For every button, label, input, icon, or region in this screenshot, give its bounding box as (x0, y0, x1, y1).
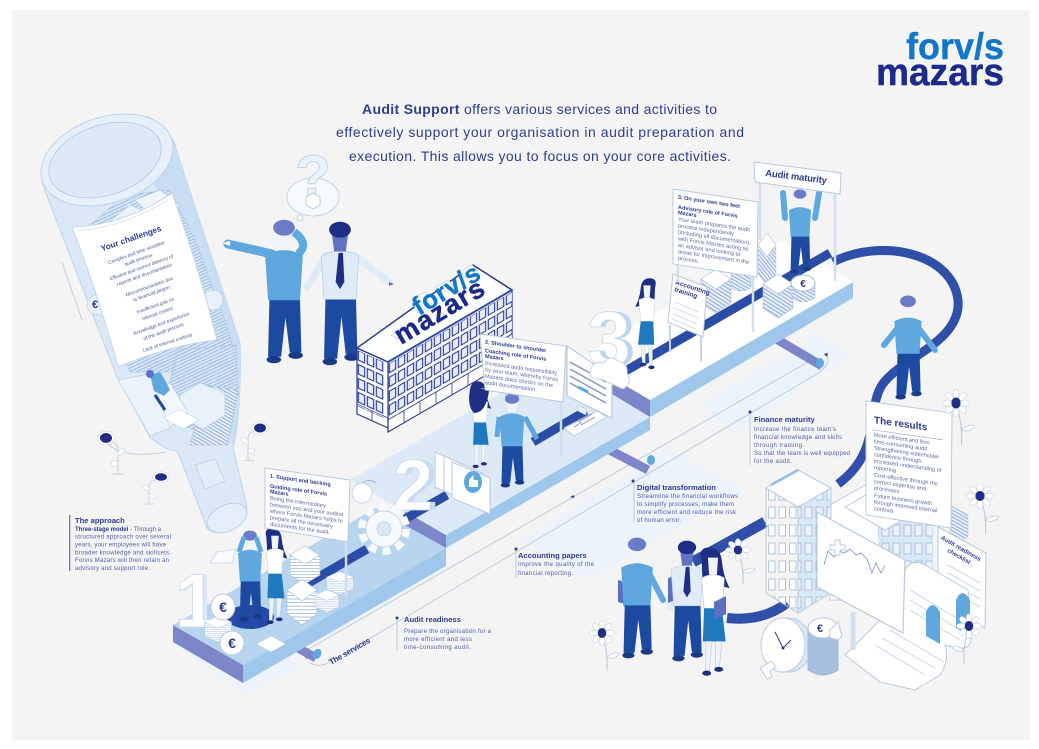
number 1: 1 (179, 559, 221, 644)
checklist title: checklist (946, 548, 971, 566)
track arrows (304, 353, 828, 659)
front building roof (766, 470, 831, 507)
sign 3: on your own two feet: an advisor and looking at (678, 243, 741, 258)
woman on stage 1 (266, 528, 287, 624)
sign: the results: More efficient and less (874, 433, 930, 446)
intro text (336, 101, 744, 164)
sign 2: shoulder to shoulder: Increased audit responsibility (485, 361, 557, 377)
sign: the results: controls (874, 506, 894, 515)
man with tie (307, 222, 394, 365)
number 1: 1 (175, 559, 217, 644)
sign 1: support and backing: prepare all the necessary (270, 515, 333, 530)
sign: audit maturity (754, 162, 841, 281)
logo: forvis mazars (876, 26, 1004, 94)
roof letter blocks (391, 265, 478, 339)
stage 2 people (469, 381, 537, 488)
front building left wall (766, 488, 798, 613)
sign 3: on your own two feet: process. (678, 256, 700, 265)
man on stage 1 (238, 530, 262, 622)
monitor (567, 346, 612, 418)
motion lines (62, 116, 176, 454)
flip chart: accounting training (668, 274, 711, 362)
sign: audit maturity: Audit maturity (765, 168, 828, 187)
challenges list (108, 240, 194, 354)
text: digital transformation (632, 480, 738, 524)
flip chart title: training (673, 286, 698, 300)
sign: the results: Cost-effective through the (874, 473, 938, 488)
sign 3: on your own two feet: Advisory role of Forvis (678, 205, 738, 220)
challenges list: Complex and time sensitive (108, 240, 166, 266)
connector rods between stages (298, 340, 824, 661)
stage 3 teacher (635, 278, 688, 369)
challenges list: reports and documentation (116, 262, 173, 288)
number 2: 2 (398, 446, 438, 526)
sign 1: support and backing (265, 468, 350, 597)
text: accounting papers: Improve the quality of the (518, 562, 595, 568)
text: the approach: structured approach over several (75, 534, 171, 540)
stage 3 stacks and coins (701, 233, 815, 318)
sign: the results: Future business growth (874, 493, 932, 507)
euro coin lower: € (228, 635, 236, 651)
text: audit readiness: Prepare the organisation for a (404, 629, 492, 635)
text: the approach: The approach (75, 516, 125, 525)
sign: the results: through improved internal (874, 500, 937, 514)
rear building (830, 478, 932, 600)
large flowers (590, 389, 999, 671)
sign 2: shoulder to shoulder (480, 334, 566, 457)
number 3: 3 (592, 295, 636, 383)
sign 2: shoulder to shoulder: Mazars does checks on the (485, 374, 553, 389)
sign: the results: The results (874, 415, 928, 434)
the services label: The services (328, 636, 372, 667)
sign: the results (866, 401, 952, 528)
forvis mazars building (357, 257, 512, 432)
woman from behind (469, 381, 491, 468)
sign 2: shoulder to shoulder: 2. Shoulder to shoulder (485, 340, 547, 354)
text: accounting papers: Accounting papers (518, 551, 587, 560)
text: the approach: Three-stage model - Through a (75, 527, 162, 533)
apple icon (352, 480, 376, 503)
text: finance maturity (748, 410, 850, 465)
paper label: your challenges (72, 193, 217, 367)
person inside bottle (146, 370, 170, 410)
intro text: execution. This allows you to focus on your core activities. (349, 148, 731, 164)
man with folder (618, 538, 663, 658)
challenges list: internal control (142, 306, 174, 322)
text: digital transformation: more efficient and reduce the risk (637, 510, 737, 516)
challenges list: audit process (124, 252, 154, 268)
logo: forvis mazars: forv/s (906, 26, 1004, 67)
platform stage 3 (579, 240, 853, 417)
walking man on ribbon (884, 296, 935, 399)
building left wall (357, 348, 388, 428)
roof logo: forv/s (407, 257, 486, 321)
text: the approach: broader knowledge and skillsets. (75, 550, 171, 556)
walking man (497, 393, 537, 488)
bottle opening (39, 109, 171, 211)
clock (760, 618, 812, 679)
maturity man (783, 189, 819, 274)
text: audit readiness (396, 615, 492, 651)
checklist document back (938, 527, 986, 628)
sign 1: support and backing: Guiding role of Forvis (270, 484, 327, 498)
woman with folder (701, 547, 730, 676)
thumbs up cards (435, 452, 490, 514)
text: finance maturity: through training. (754, 443, 804, 449)
sign 2: shoulder to shoulder: Coaching role of Forvis (485, 348, 546, 363)
building roof (357, 265, 512, 362)
challenges list: of the audit process (143, 322, 185, 342)
euro coin upper (211, 594, 235, 620)
text: digital transformation: to simplify processes, make them (637, 502, 734, 508)
sign: the results: correct expertise and (874, 479, 926, 492)
sign: the results: time-consuming audit (874, 439, 927, 453)
speech bubble with question mark (287, 144, 339, 221)
sign 3: on your own two feet: Your team prepares the audit (678, 217, 750, 234)
sign 3: on your own two feet: Mazars (678, 210, 697, 219)
text: the approach (69, 515, 171, 572)
flip chart title: Accounting (674, 279, 711, 297)
checklist title: Audit readiness (940, 535, 982, 563)
sign 3: on your own two feet: with Forvis Mazars acting as (677, 236, 749, 253)
text: audit readiness: more efficient and less (404, 637, 472, 643)
text: accounting papers: financial reporting. (518, 571, 573, 577)
gear (362, 507, 406, 551)
challenges list: Efficient and correct delivery of (109, 254, 175, 282)
bottle rim (29, 98, 185, 222)
text: the approach: advisory and support role. (75, 566, 150, 572)
text: the approach: Forvis Mazars will then retain an (75, 558, 169, 564)
euro mark inside bottle: € (92, 299, 98, 311)
number 2: 2 (393, 446, 433, 526)
challenges list: to financial jargon (133, 285, 171, 303)
bottle body (42, 140, 247, 532)
roof logo: mazars (389, 273, 490, 350)
sign 2: shoulder to shoulder: Mazars (485, 354, 504, 362)
paper stacks stage 1 (204, 546, 354, 652)
sign 3: on your own two feet (673, 189, 758, 332)
man pointing (222, 220, 303, 363)
chart board (817, 512, 905, 650)
intro text: Audit Support offers various services and activities to (362, 101, 717, 117)
small flowers left (97, 422, 269, 504)
sign 1: support and backing: where Forvis Mazars helps to (269, 509, 343, 525)
bottle with challenges (29, 98, 252, 539)
blue ribbon path (693, 251, 958, 619)
front building right wall (798, 488, 831, 613)
sign: the results: processes (874, 486, 900, 495)
coin stack: € (817, 623, 823, 635)
tablet (564, 411, 607, 436)
bottom people group (618, 538, 730, 676)
sign: the results: Strengthening stakeholder (874, 446, 939, 461)
cloud (590, 358, 629, 389)
text: finance maturity: So that the team is well equipped (754, 451, 850, 457)
challenges list: Insufficient grip on (136, 296, 176, 316)
number 3: 3 (587, 295, 631, 383)
coin stack (808, 618, 842, 675)
services track line (300, 354, 828, 665)
text: audit readiness: time-consuming audit. (404, 645, 471, 651)
bottle shaded side (150, 140, 240, 448)
sign 1: support and backing: Mazars (270, 489, 289, 498)
text: finance maturity: Increase the finance team's (754, 427, 836, 433)
sign 1: support and backing: Being the intermediary (270, 496, 326, 510)
platform stage 1 (173, 508, 446, 683)
stage 3 stacks and coins: € (800, 279, 806, 290)
sign: the results: increased understanding of (874, 459, 942, 474)
challenges heading: Your challenges (99, 223, 163, 253)
bottle contents (87, 190, 238, 489)
platform stage 2 (350, 352, 650, 548)
side stack (950, 505, 968, 547)
sign 1: support and backing: between you and your auditor (270, 502, 344, 519)
euro coin lower (220, 631, 244, 655)
sign 3: on your own two feet: (including all documentation), (678, 230, 751, 247)
text: finance maturity: for the audit. (754, 459, 792, 465)
sign 3: on your own two feet: process independently (678, 223, 734, 238)
sign 2: shoulder to shoulder: by your team, whereby Forvis (485, 367, 558, 383)
text: the approach: years, your employees will have (75, 542, 167, 548)
text: finance maturity: Finance maturity (754, 415, 816, 424)
text: digital transformation: of human error. (637, 518, 681, 524)
text: audit readiness: Audit readiness (404, 615, 461, 624)
challenges list: Knowledge and experience (133, 311, 191, 337)
sign 3: on your own two feet: areas for improvement in the (678, 249, 749, 266)
sign 1: support and backing: documents for the audit. (270, 522, 330, 536)
sign: the results: reporting (874, 465, 896, 474)
euro coin upper: € (219, 599, 227, 615)
challenges list: Miscommunication due (125, 276, 174, 298)
bottle neck lip (202, 497, 252, 539)
text: accounting papers (514, 548, 595, 577)
building right wall (388, 290, 512, 432)
scrolled checklist (845, 562, 971, 690)
text: finance maturity: financial knowledge and skills (754, 435, 842, 441)
sign 1: support and backing: 1. Support and backing (270, 474, 331, 488)
ground shadows (175, 335, 850, 695)
sign 2: shoulder to shoulder: audit documentation. (485, 380, 537, 394)
challenges list: Lack of internal controls (142, 332, 194, 354)
text: digital transformation: Digital transformation (637, 483, 716, 492)
stage 1 people (238, 528, 287, 624)
man with tie and folder (668, 541, 703, 661)
sign 3: on your own two feet: 3. On your own two feet (678, 195, 740, 210)
city buildings (766, 470, 968, 613)
text: digital transformation: Streamline the financial workflows (637, 494, 738, 500)
intro text: effectively support your organisation in audit preparation and (336, 124, 744, 140)
sign: the results: confidence through (874, 452, 921, 465)
logo: forvis mazars: mazars (876, 52, 1004, 94)
speech bubble with question mark: ? (295, 144, 331, 209)
